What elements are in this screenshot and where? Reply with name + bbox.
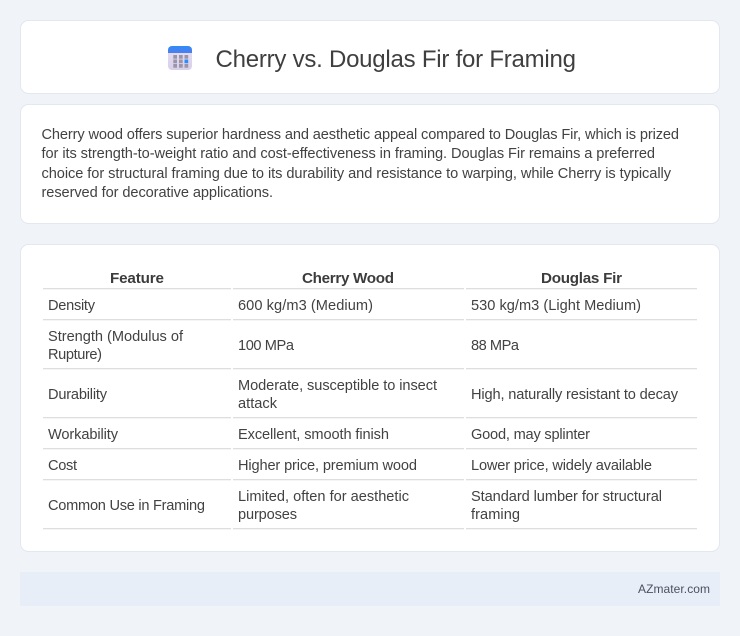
row: common use in framing: Standard lumber for structural xyxy=(471,489,662,505)
footer bar xyxy=(20,572,720,606)
row: density: Density xyxy=(48,298,96,314)
row: common use in framing: purposes xyxy=(238,507,297,523)
row: density xyxy=(48,298,641,314)
panel: header card xyxy=(20,20,720,94)
row: cost: Cost xyxy=(48,458,77,474)
row: common use in framing: Limited, often for aesthetic xyxy=(238,489,409,505)
row: common use in framing: Common Use in Framing xyxy=(48,498,205,514)
text block: summary xyxy=(42,127,679,201)
row: workability xyxy=(48,427,590,443)
row: durability: Moderate, susceptible to insect xyxy=(238,378,437,394)
icon: calendar xyxy=(168,46,192,70)
text block: summary: choice for structural framing due to its durability and resistance to warping, while Cherry is typically xyxy=(42,166,672,182)
row: common use in framing: framing xyxy=(471,507,520,523)
table header row: Douglas Fir xyxy=(541,270,622,287)
row: durability: Durability xyxy=(48,387,108,403)
panel: comparison table card xyxy=(20,244,720,552)
row: cost xyxy=(48,458,652,474)
row: density: 600 kg/m3 (Medium) xyxy=(238,298,373,314)
row: strength: Strength (Modulus of xyxy=(48,329,184,345)
row: durability: attack xyxy=(238,396,278,412)
row: strength: 88 MPa xyxy=(471,338,520,354)
row: durability xyxy=(48,378,679,412)
row: cost: Lower price, widely available xyxy=(471,458,652,474)
footer credit: AZmater.com xyxy=(638,582,710,596)
text block: summary: for its strength-to-weight ratio and cost-effectiveness in framing. Douglas Fir remains a preferred xyxy=(42,146,655,162)
row: cost: Higher price, premium wood xyxy=(238,458,417,474)
row: workability: Excellent, smooth finish xyxy=(238,427,389,443)
row: common use in framing xyxy=(48,489,662,523)
text block: summary: Cherry wood offers superior hardness and aesthetic appeal compared to Douglas Fir, which is prized xyxy=(42,127,679,143)
row: strength: 100 MPa xyxy=(238,338,295,354)
row: durability: High, naturally resistant to decay xyxy=(471,387,679,403)
text block: summary: reserved for decorative applications. xyxy=(42,185,273,201)
row: density: 530 kg/m3 (Light Medium) xyxy=(471,298,641,314)
row: strength xyxy=(48,329,520,363)
title: Cherry vs. Douglas Fir for Framing xyxy=(216,46,576,73)
table header row xyxy=(110,270,622,287)
panel: summary card xyxy=(20,104,720,224)
table header row: Cherry Wood xyxy=(302,270,394,287)
row: workability: Good, may splinter xyxy=(471,427,590,443)
table header row: Feature xyxy=(110,270,164,287)
row: strength: Rupture) xyxy=(48,347,102,363)
row: workability: Workability xyxy=(48,427,119,443)
